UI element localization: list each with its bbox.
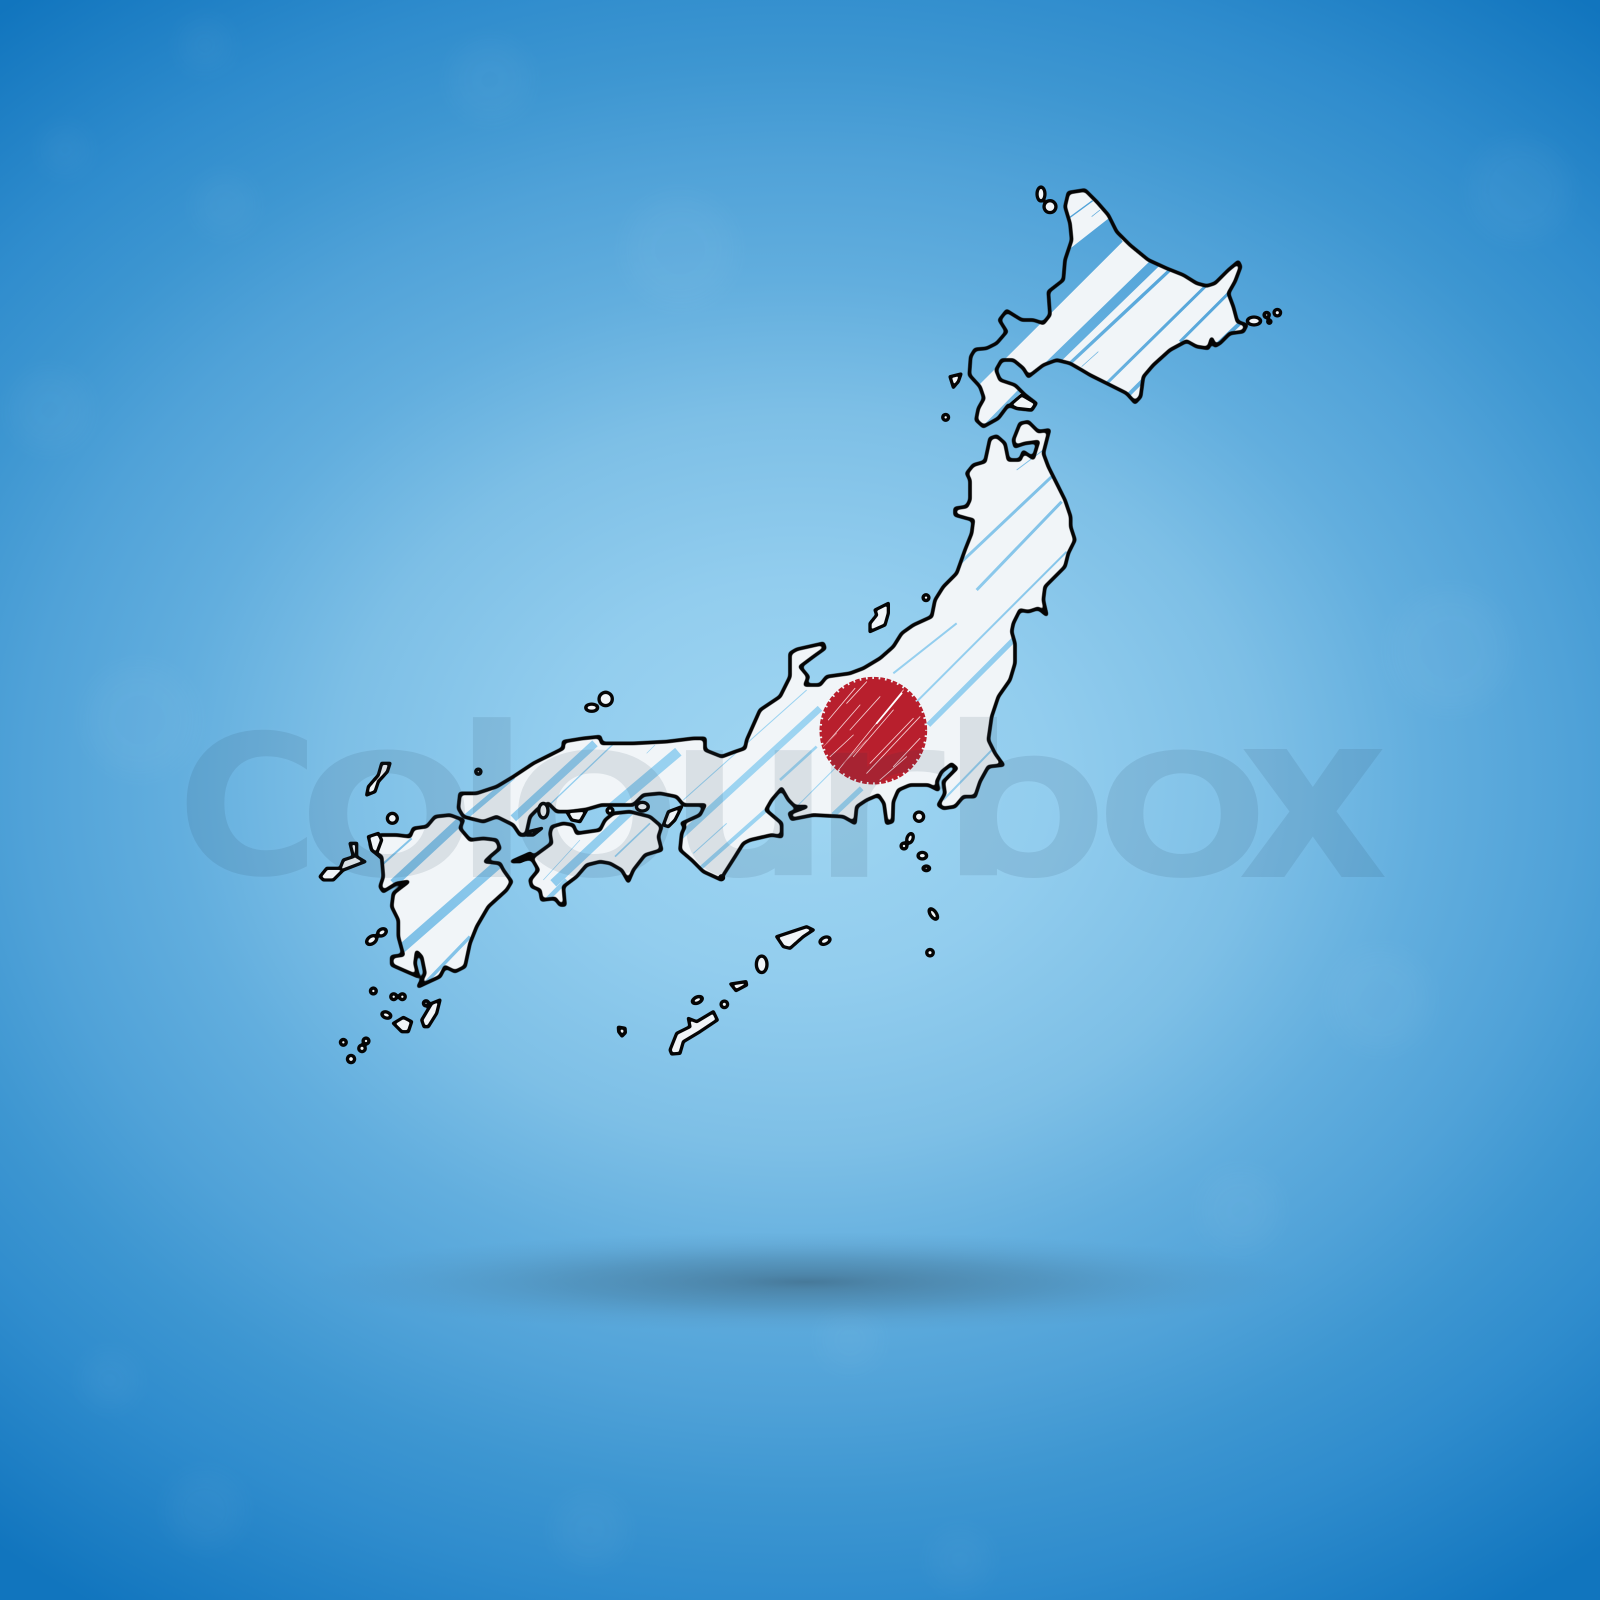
watermark text: o	[1096, 676, 1268, 921]
watermark text: x	[1238, 661, 1388, 933]
small outlying islands	[320, 187, 1281, 1063]
island: Honshu	[458, 422, 1075, 880]
island: Kyushu	[370, 815, 512, 987]
map of Japan	[320, 187, 1281, 1063]
watermark text: o	[508, 676, 680, 921]
watermark text: C	[177, 694, 319, 920]
watermark text	[177, 661, 1388, 933]
island: Hokkaido	[969, 190, 1247, 427]
watermark text: b	[944, 690, 1104, 916]
watermark text: o	[298, 676, 475, 921]
watermark text: u	[673, 678, 826, 917]
island: Shikoku	[512, 812, 662, 905]
watermark text: r	[803, 670, 945, 927]
watermark text: l	[455, 683, 529, 927]
red sun scribble	[821, 678, 926, 783]
ground shadow beneath the map	[306, 1232, 1306, 1332]
